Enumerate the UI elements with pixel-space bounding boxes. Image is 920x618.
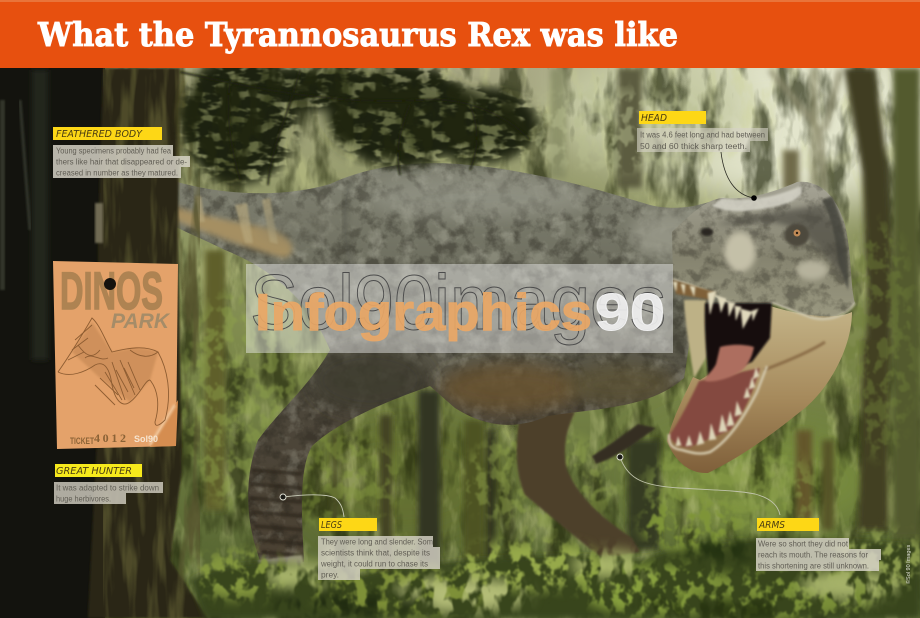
callout: legs (280, 494, 440, 580)
ticket hole (104, 278, 116, 290)
watermark panel (246, 264, 673, 353)
ticket subtitle: PARK (111, 310, 171, 333)
ticket number: TICKET (70, 436, 94, 446)
ticket number: 4012 (94, 431, 126, 445)
far leg (517, 412, 640, 558)
label text: ARMS (758, 520, 785, 531)
ticket logo: Sol90 (134, 434, 158, 444)
fern undergrowth (190, 500, 920, 618)
upper teeth (673, 282, 758, 328)
label bar (319, 518, 377, 531)
description: It was 4.6 feet long and had between (640, 130, 765, 140)
description: Were so short they did not (758, 540, 849, 548)
nostril (701, 228, 713, 236)
label bar (53, 127, 162, 140)
label bar (55, 464, 142, 477)
title: What the Tyrannosaurus Rex was like (37, 15, 678, 54)
description: weight, it could run to chase its (320, 560, 428, 568)
watermark infographics: Infographics (255, 284, 592, 342)
small arm (592, 424, 656, 464)
foreground tree trunks at left (0, 68, 208, 618)
skull skin texture (672, 182, 852, 318)
pointer (617, 454, 780, 515)
photo credit: ©Sol 90 Images (905, 545, 912, 584)
watermark outlined wordmark: Sol90images (250, 258, 666, 346)
lower lip (669, 366, 767, 453)
label text: HEAD (641, 113, 667, 124)
torso, tail and near leg (178, 163, 719, 562)
label text: FEATHERED BODY (56, 129, 143, 140)
dinosaur sketch (58, 318, 169, 425)
ticket number (70, 431, 126, 446)
label bar (757, 518, 819, 531)
description: reach its mouth. The reasons for (758, 550, 868, 560)
description: Young specimens probably had fea (56, 146, 172, 156)
description (637, 128, 768, 152)
tongue (705, 345, 754, 381)
description: They were long and slender. Som (321, 538, 433, 546)
ticket title: DINOS (60, 262, 163, 321)
callout: feathered body (53, 127, 190, 178)
description (53, 145, 190, 178)
ticket (53, 261, 178, 449)
description (54, 482, 163, 504)
watermark (246, 258, 673, 353)
description (756, 538, 881, 571)
label bar (639, 111, 706, 124)
label text: GREAT HUNTER (56, 466, 132, 477)
cheek membrane (684, 300, 708, 378)
eye (785, 224, 809, 246)
description: prey. (321, 570, 339, 580)
near foot claws (258, 555, 305, 578)
description: It was adapted to strike down (56, 484, 159, 492)
tail glimpse behind trunks (95, 203, 103, 243)
tyrannosaurus rex (160, 150, 860, 580)
hanging tree canopy (180, 56, 538, 185)
lower jaw (667, 306, 852, 473)
title banner (0, 0, 920, 68)
lower mouth floor (669, 368, 760, 447)
skull (672, 182, 855, 318)
description: huge herbivores. (56, 494, 111, 504)
jaw crease (764, 342, 825, 370)
skull highlight patches (712, 186, 802, 211)
description (318, 536, 440, 580)
callout: arms (617, 454, 881, 571)
ticket paper (53, 261, 178, 449)
mid foliage texture (180, 90, 916, 540)
callout: head (637, 111, 768, 201)
upper lip (673, 279, 855, 319)
lower teeth (676, 368, 759, 446)
description: scientists think that, despite its (321, 548, 430, 558)
description: creased in number as they matured. (56, 168, 178, 178)
label text: LEGS (321, 520, 342, 531)
pointer (721, 152, 757, 201)
pointer (280, 494, 344, 517)
watermark 90: 90 (595, 284, 665, 342)
description: 50 and 60 thick sharp teeth. (640, 142, 747, 151)
description: this shortening are still unknown. (758, 562, 869, 570)
mouth interior (705, 303, 772, 377)
callout: great hunter (54, 464, 163, 504)
head (660, 175, 860, 473)
description: thers like hair that disappeared or de- (56, 158, 187, 166)
